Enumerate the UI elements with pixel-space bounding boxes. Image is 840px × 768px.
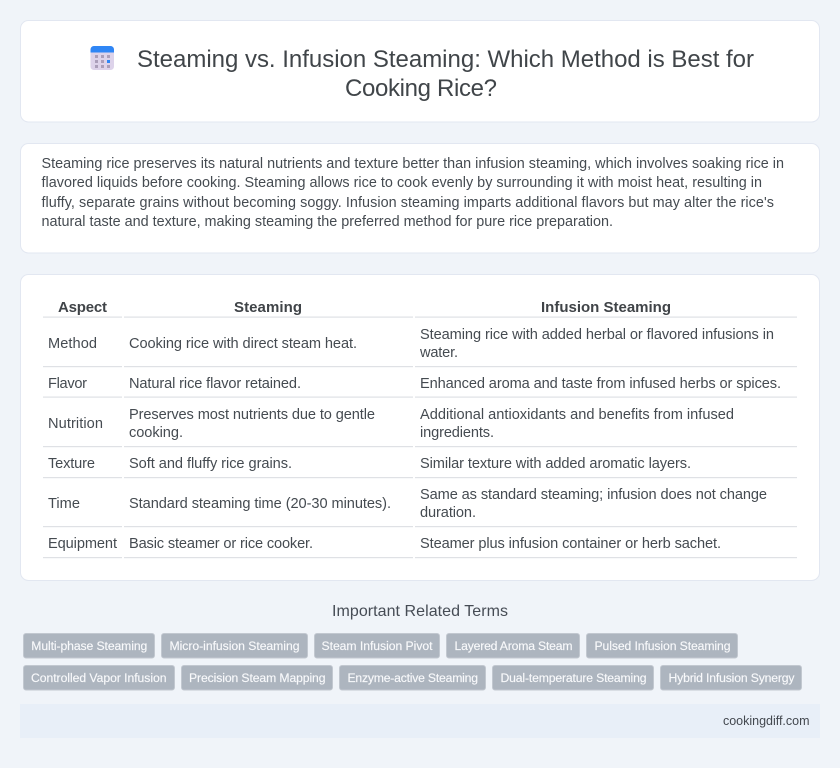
- tag group: related terms: Enzyme-active Steaming: [348, 671, 478, 685]
- row: nutrition: ingredients.: [420, 425, 494, 441]
- table header: Aspect: [58, 299, 107, 316]
- tag group: related terms: Precision Steam Mapping: [189, 671, 326, 685]
- tag group: related terms: Layered Aroma Steam: [454, 639, 572, 653]
- heading: important related terms: Important Related Terms: [332, 603, 508, 620]
- tag group: related terms: [24, 634, 802, 690]
- row: flavor: [48, 376, 781, 392]
- intro paragraph: natural taste and texture, making steaming the preferred method for pure rice preparation.: [42, 214, 613, 230]
- tag group: related terms: Micro-infusion Steaming: [170, 639, 300, 653]
- title: [137, 46, 754, 102]
- tag group: related terms: Dual-temperature Steaming: [500, 671, 646, 685]
- row: method: Steaming rice with added herbal or flavored infusions in: [420, 327, 774, 343]
- intro paragraph: [42, 156, 784, 230]
- row: time: Same as standard steaming; infusion does not change: [420, 487, 767, 503]
- row: equipment: Basic steamer or rice cooker.: [129, 536, 313, 552]
- panel: introduction: [20, 144, 820, 253]
- table header: Infusion Steaming: [541, 299, 671, 316]
- row: texture: Soft and fluffy rice grains.: [129, 456, 292, 472]
- footer bar: [20, 704, 820, 738]
- row: method: Cooking rice with direct steam heat.: [129, 336, 357, 352]
- row: nutrition: Additional antioxidants and benefits from infused: [420, 407, 734, 423]
- row: texture: [48, 456, 691, 472]
- table header: [58, 299, 671, 316]
- tag group: related terms: Hybrid Infusion Synergy: [668, 671, 795, 685]
- row: nutrition: Preserves most nutrients due to gentle: [129, 407, 375, 423]
- tag group: related terms: Controlled Vapor Infusion: [31, 671, 166, 685]
- row: nutrition: [48, 407, 734, 441]
- row: time: [48, 487, 767, 521]
- tag group: related terms: Steam Infusion Pivot: [322, 639, 433, 653]
- row: flavor: Flavor: [48, 376, 87, 392]
- row: time: Standard steaming time (20-30 minutes).: [129, 496, 391, 512]
- row: texture: Texture: [48, 456, 95, 472]
- row: time: duration.: [420, 505, 476, 521]
- row: flavor: Natural rice flavor retained.: [129, 376, 301, 392]
- row: equipment: Equipment: [48, 536, 117, 552]
- header panel: [20, 20, 820, 122]
- row: time: Time: [48, 496, 80, 512]
- tag group: related terms: Pulsed Infusion Steaming: [594, 639, 730, 653]
- row: texture: Similar texture with added aromatic layers.: [420, 456, 691, 472]
- tag group: related terms: Multi-phase Steaming: [31, 639, 147, 653]
- intro paragraph: Steaming rice preserves its natural nutrients and texture better than infusion steaming, which involves soaking rice in: [42, 156, 784, 172]
- row: method: Method: [48, 336, 97, 352]
- row: nutrition: Nutrition: [48, 416, 103, 432]
- row: nutrition: cooking.: [129, 425, 183, 441]
- intro paragraph: flavored liquids before cooking. Steaming allows rice to cook evenly by surrounding it with moist heat, resulting in: [42, 175, 762, 191]
- title: Steaming vs. Infusion Steaming: Which Method is Best for: [137, 46, 754, 73]
- title: Cooking Rice?: [345, 75, 497, 102]
- panel: comparison table: [20, 274, 820, 580]
- row: equipment: Steamer plus infusion container or herb sachet.: [420, 536, 721, 552]
- table header: Steaming: [234, 299, 302, 316]
- row: equipment: [48, 536, 721, 552]
- footer bar: cookingdiff.com: [723, 714, 810, 728]
- icon: calendar: [90, 46, 114, 70]
- row: method: [48, 327, 774, 361]
- row: method: water.: [419, 345, 458, 361]
- intro paragraph: fluffy, separate grains without becoming soggy. Infusion steaming imparts additional flavors but may alter the rice's: [42, 195, 774, 211]
- row: flavor: Enhanced aroma and taste from infused herbs or spices.: [420, 376, 781, 392]
